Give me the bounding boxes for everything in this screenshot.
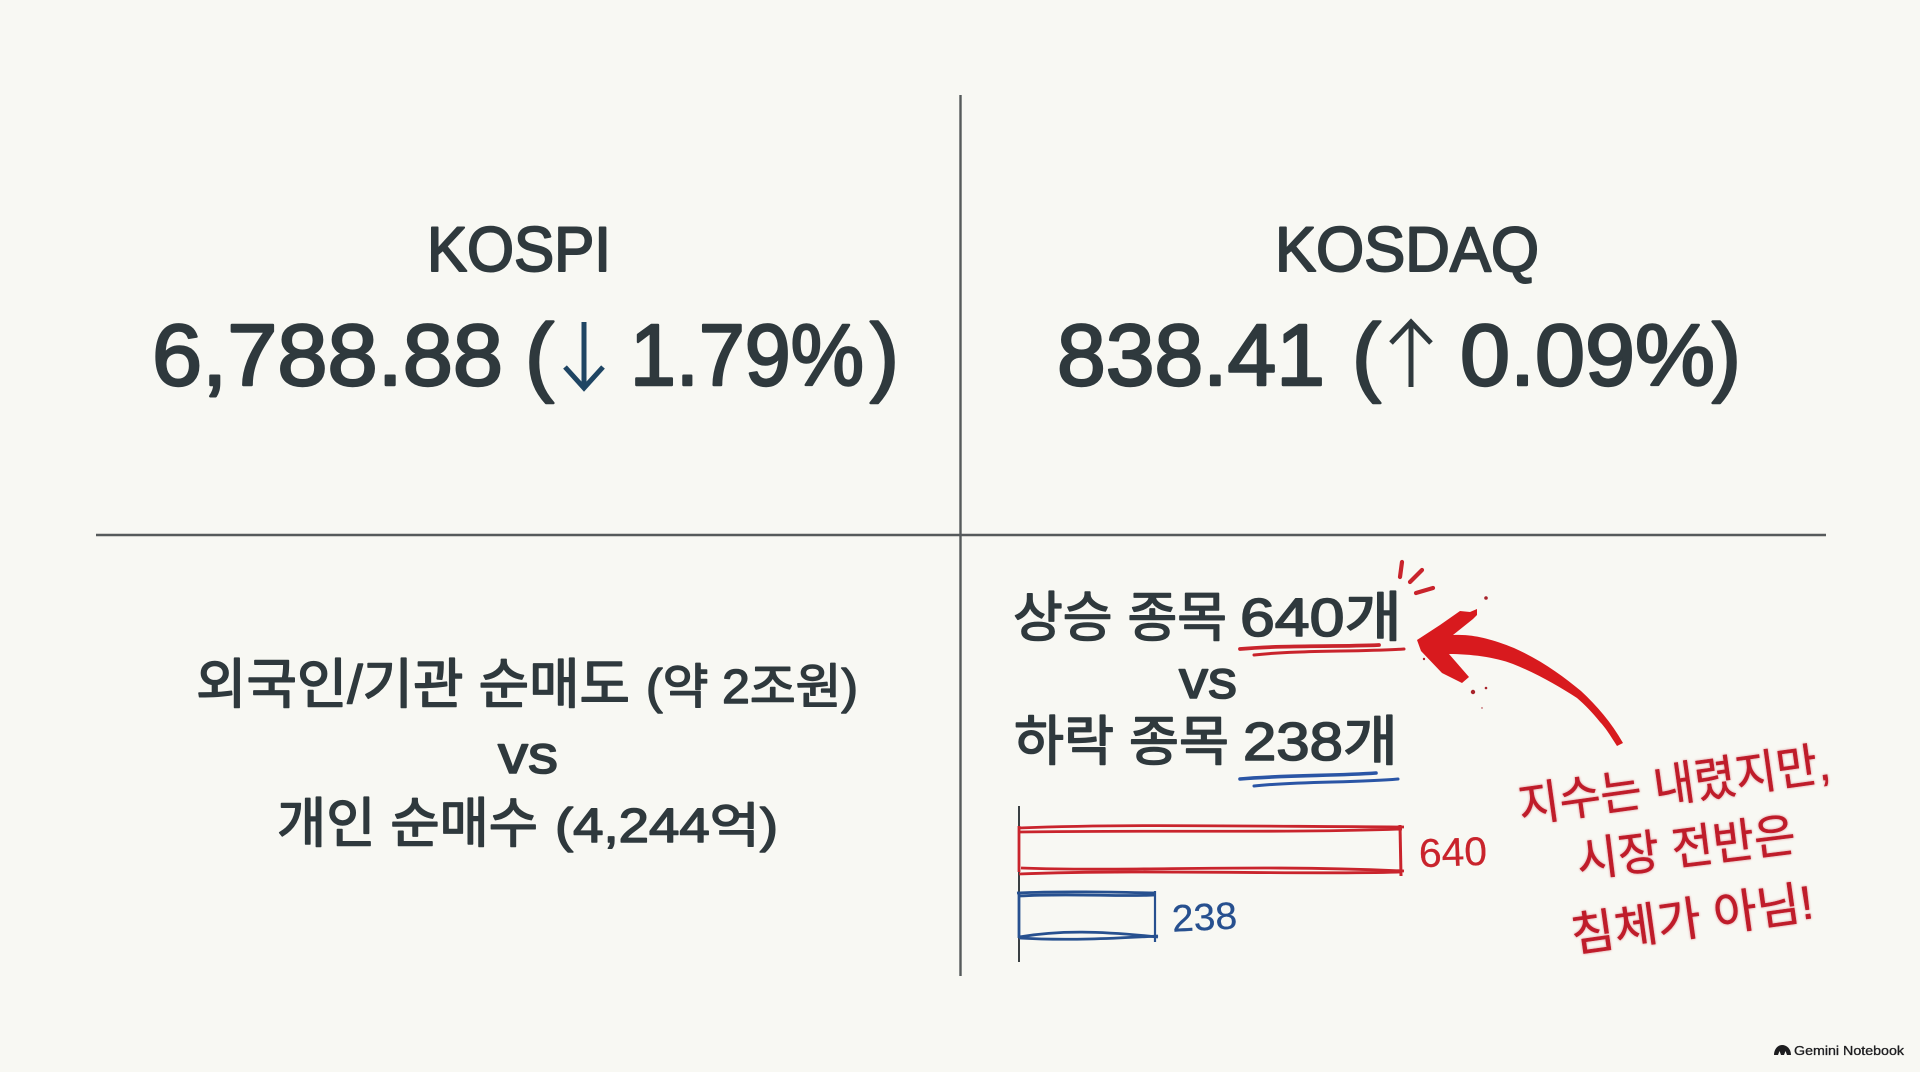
text: individual net buying: 개인 순매수 [277,794,538,854]
text: foreign and institutional net selling: (약 2조원) [646,661,858,714]
value: KOSDAQ index: ) [1712,307,1741,404]
value: KOSPI index: 6,788.88 [152,307,503,404]
value: KOSPI index: ) [870,307,899,404]
label: 238: 238 [1171,895,1238,941]
bar: advancers 640 [1019,825,1404,876]
callout: handwritten note: 침체가 아님! [1568,875,1817,962]
value: KOSPI index: 1.79% [630,307,864,404]
icon: notebook logo [1774,1045,1791,1055]
bar: decliners 238 [1017,891,1158,942]
text: declining stocks: 하락 종목 [1014,712,1229,772]
icon: down arrow [565,322,603,388]
label: 640: 640 [1418,830,1488,876]
icon: burst ticks [1400,562,1433,593]
panel: advancers vs decliners [1013,588,1488,962]
value: KOSPI index [152,307,899,404]
text: declining stocks [1014,712,1398,772]
value: KOSPI index: ( [525,307,554,404]
text: vs: vs [1179,650,1237,710]
text: declining stocks: 238개 [1243,712,1398,772]
underline: blue [1240,773,1398,786]
text: vs: vs [498,725,558,785]
text: individual net buying [277,794,778,854]
watermark: Gemini Notebook: Gemini Notebook [1794,1044,1905,1058]
text: advancing stocks: 상승 종목 [1013,588,1227,648]
icon: up arrow [1391,322,1431,387]
underline: red [1240,645,1404,655]
value: KOSDAQ index [1057,307,1741,404]
heading: KOSDAQ: KOSDAQ [1275,215,1539,285]
icon: curved arrow [1417,609,1623,746]
text: foreign and institutional net selling: 외국인/기관 순매도 [196,655,630,715]
bar chart [1017,806,1404,962]
decoration: ink splatter [1423,596,1488,709]
text: advancing stocks: 640개 [1240,588,1402,648]
callout: red emphasis arrow [1400,562,1623,746]
panel: KOSDAQ [1057,215,1741,404]
panel: KOSPI [152,215,899,404]
value: KOSDAQ index: 838.41 [1057,307,1325,404]
panel: investor flows [196,655,858,854]
callout: handwritten note: 시장 전반은 [1574,808,1798,887]
heading: KOSPI: KOSPI [427,215,611,285]
text: advancing stocks [1013,588,1402,648]
callout: handwritten note [1515,736,1833,962]
callout: handwritten note: 지수는 내렸지만, [1515,736,1833,833]
value: KOSDAQ index: ( [1352,307,1381,404]
value: KOSDAQ index: 0.09% [1460,307,1715,404]
text: foreign and institutional net selling [196,655,858,715]
text: individual net buying: (4,244억) [555,800,778,853]
